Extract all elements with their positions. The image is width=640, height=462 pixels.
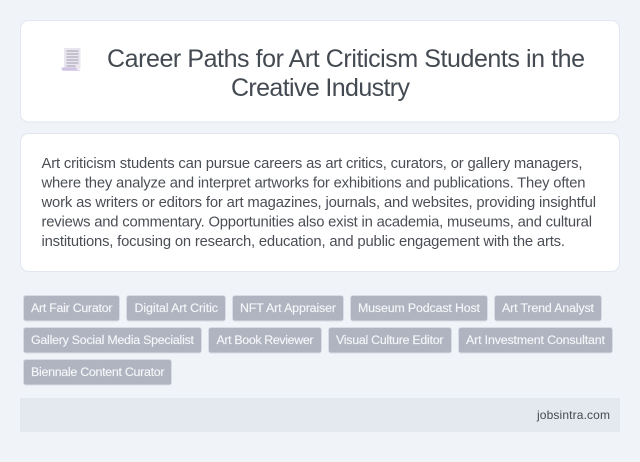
title: Creative Industry [231,74,410,102]
tag: Museum Podcast Host [350,296,488,321]
tag: Art Investment Consultant: Art Investment Consultant [466,333,606,347]
tag: Visual Culture Editor [328,328,452,353]
footer [20,398,620,432]
title: Career Paths for Art Criticism Students in the [107,45,585,73]
tag: Museum Podcast Host: Museum Podcast Host [358,301,481,315]
text block: description: Art criticism students can pursue careers as art critics, curators, or gallery managers, [42,156,582,172]
text block: description: where they analyze and interpret artworks for exhibitions and publications. They often [40,176,586,192]
tag: Art Book Reviewer: Art Book Reviewer [216,333,314,347]
tag: Biennale Content Curator: Biennale Content Curator [31,365,164,379]
panel: description [20,134,620,272]
tag: Art Fair Curator: Art Fair Curator [31,301,112,315]
tag: Art Book Reviewer [208,328,322,353]
tag: Art Trend Analyst [494,296,602,321]
text block: description [40,156,596,250]
text block: description: work as writers or editors for art magazines, journals, and websites, providing insightful [40,195,596,211]
icon: paper scroll [62,48,80,71]
tag: Art Investment Consultant [458,328,612,353]
tag: Digital Art Critic: Digital Art Critic [134,301,218,315]
tag: Biennale Content Curator [24,360,172,385]
text block: description: institutions, focusing on research, education, and public engagement with the arts. [42,234,565,250]
tag: Gallery Social Media Specialist [24,328,202,353]
text block: description: reviews and commentary. Opportunities also exist in academia, museums, and cultural [42,214,592,230]
footer source text: jobsintra.com [536,408,610,422]
title [107,45,585,102]
tag: NFT Art Appraiser: NFT Art Appraiser [240,301,336,315]
tag: Gallery Social Media Specialist: Gallery Social Media Specialist [31,333,195,347]
tag list [24,296,612,385]
tag: Visual Culture Editor: Visual Culture Editor [336,333,444,347]
tag: Art Fair Curator [24,296,120,321]
tag: Art Trend Analyst: Art Trend Analyst [502,301,595,315]
tag: Digital Art Critic [126,296,226,321]
tag: NFT Art Appraiser [232,296,344,321]
panel: title card [20,20,620,122]
